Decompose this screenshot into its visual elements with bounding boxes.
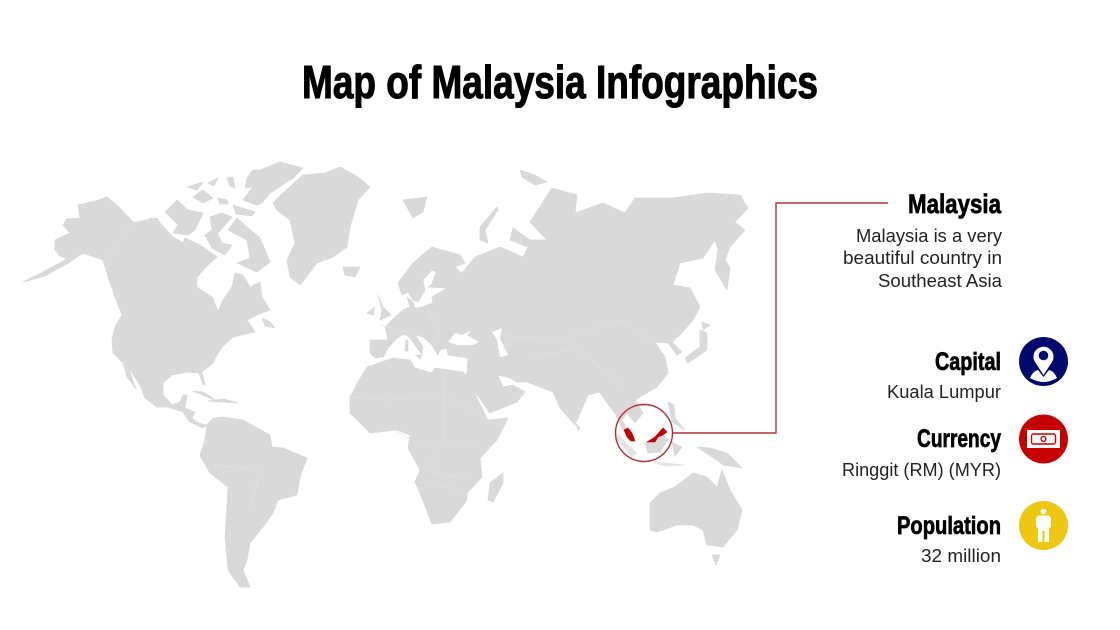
world map (23, 162, 748, 587)
Malaysia text block: Malaysia (908, 189, 1002, 219)
Sri Lanka (576, 424, 580, 431)
Arctic islands (243, 162, 303, 205)
North America (23, 197, 270, 428)
Australia (650, 470, 742, 547)
Novaya Zemlya (480, 207, 498, 243)
icon: location pin (1019, 337, 1068, 386)
currency text: Currency (917, 425, 1001, 453)
population text: 32 million (921, 545, 1001, 566)
icon: banknote (1019, 414, 1068, 464)
Malaysia text block (843, 189, 1003, 291)
Malaysia text block: Malaysia is a very (856, 225, 1003, 246)
capital text (887, 348, 1001, 402)
Japan (685, 330, 707, 363)
currency text: Ringgit (RM) (MYR) (842, 459, 1001, 480)
currency text (842, 425, 1001, 480)
Southeast Asia islands (615, 432, 637, 457)
population text: Population (897, 512, 1001, 540)
country borders (105, 222, 650, 510)
Franz Josef Land (520, 170, 547, 185)
Malaysia highlight (624, 428, 667, 442)
Africa (350, 358, 508, 524)
capital text: Capital (935, 348, 1001, 376)
callout circle and connector (616, 203, 888, 462)
Madagascar (488, 473, 503, 502)
Malaysia text block: Southeast Asia (878, 270, 1003, 291)
population text (897, 512, 1001, 566)
Malaysia text block: beautiful country in (843, 247, 1002, 268)
Greenland (273, 167, 370, 285)
title: Map of Malaysia Infographics (302, 56, 818, 108)
Mediterranean islands (405, 340, 408, 351)
Eurasia (370, 188, 748, 438)
icon: person (1019, 501, 1068, 550)
inland seas (448, 328, 508, 357)
Iceland (343, 267, 360, 277)
UK and Ireland (378, 295, 391, 320)
South America (200, 417, 307, 587)
Svalbard (403, 197, 427, 218)
capital text: Kuala Lumpur (887, 381, 1001, 402)
Caribbean (193, 391, 217, 401)
